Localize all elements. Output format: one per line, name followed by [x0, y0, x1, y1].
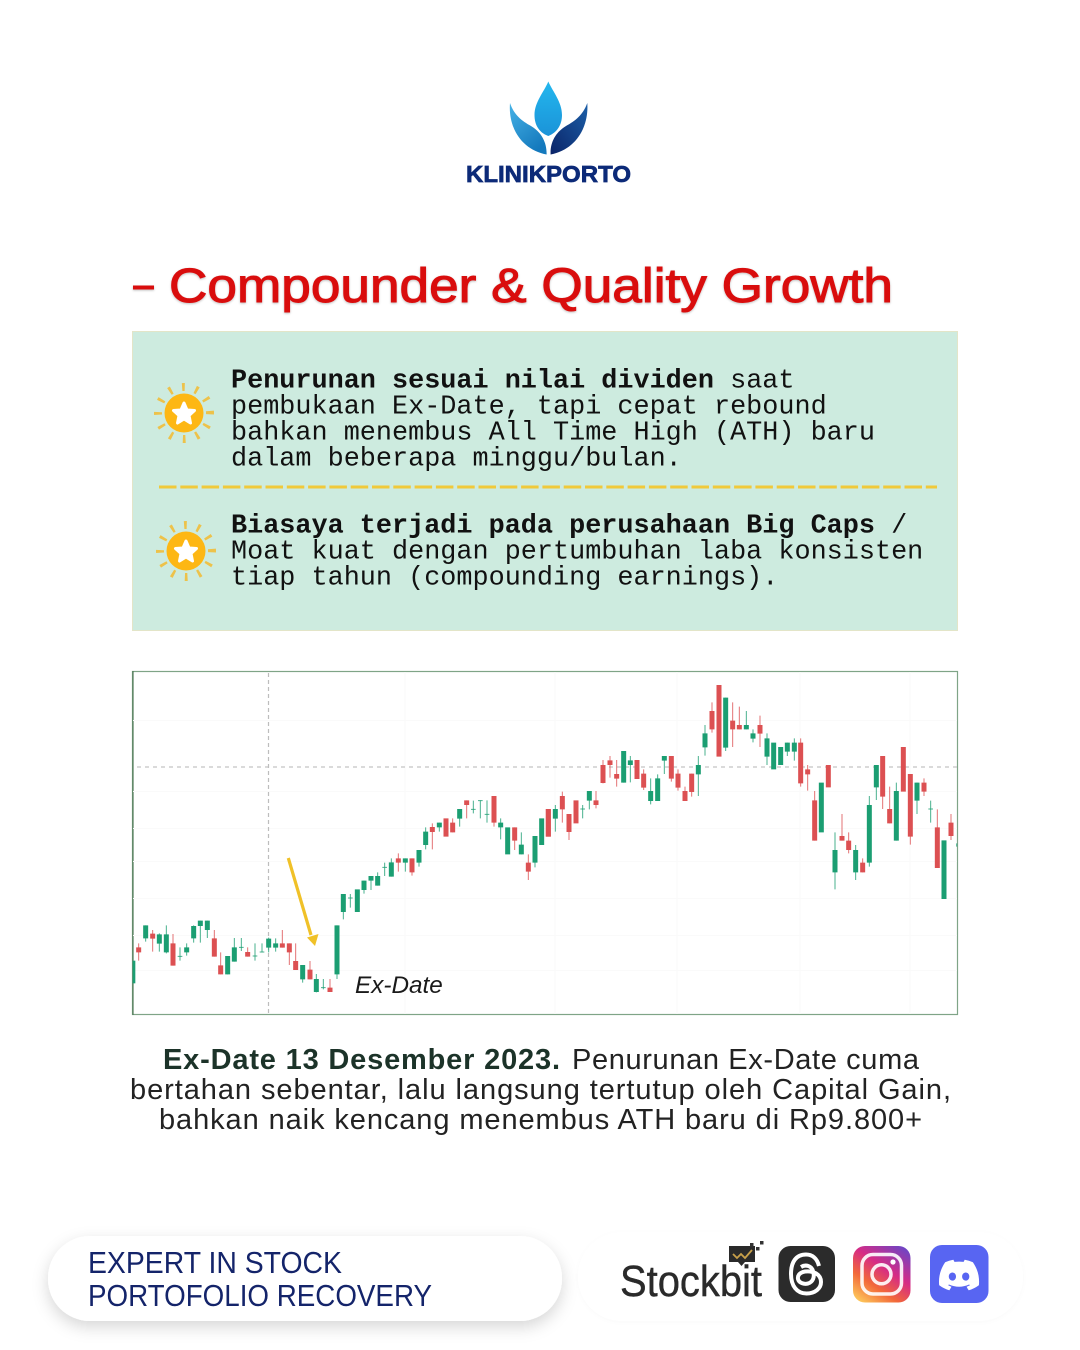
- panel: explanation: [132, 332, 958, 630]
- icon: star sun 1: [158, 387, 210, 439]
- text block 1: dalam beberapa minggu/bulan.: [231, 444, 682, 474]
- icon: star sun 2: [160, 525, 212, 577]
- caption: Penurunan Ex-Date cuma: [572, 1044, 920, 1076]
- text block 2: Biasaya terjadi pada perusahaan Big Caps /: [231, 512, 907, 542]
- panel: tagline pill: EXPERT IN STOCK: [88, 1245, 342, 1280]
- brand name: KLINIKPORTO: [466, 161, 631, 187]
- panel: tagline pill: PORTOFOLIO RECOVERY: [88, 1278, 432, 1313]
- text block 2: [231, 512, 923, 594]
- text block 1: Penurunan sesuai nilai dividen saat: [231, 366, 794, 396]
- panel: social and partner logos: [578, 1232, 1023, 1321]
- arrow: to ex-date: [288, 858, 318, 946]
- logo: Stockbit: Stockbit: [620, 1257, 762, 1306]
- icon: lotus drop: [510, 82, 587, 154]
- logo: Klinikporto: [466, 82, 631, 187]
- text block 1: bahkan menembus All Time High (ATH) baru: [231, 418, 875, 448]
- text block 1: [231, 366, 875, 474]
- candlesticks: right section: [548, 685, 957, 899]
- caption: bertahan sebentar, lalu langsung tertutup oleh Capital Gain,: [130, 1074, 951, 1106]
- caption: bahkan naik kencang menembus ATH baru di Rp9.800+: [159, 1104, 922, 1136]
- text block 2: Moat kuat dengan pertumbuhan laba konsisten: [231, 538, 923, 568]
- text block 2: tiap tahun (compounding earnings).: [231, 564, 778, 594]
- panel: tagline pill: [48, 1236, 562, 1321]
- title: Compounder & Quality Growth: [169, 260, 893, 313]
- icon: Instagram: [853, 1246, 910, 1302]
- chart: candlestick price chart: [132, 671, 958, 1015]
- icon: Discord: [930, 1245, 988, 1303]
- icon: Threads: [778, 1246, 835, 1302]
- text block 1: pembukaan Ex-Date, tapi cepat rebound: [231, 392, 827, 422]
- caption: [130, 1044, 951, 1136]
- candlesticks: left section: [134, 796, 548, 992]
- caption: Ex-Date 13 Desember 2023.: [163, 1044, 560, 1076]
- label: Ex-Date: Ex-Date: [355, 972, 443, 999]
